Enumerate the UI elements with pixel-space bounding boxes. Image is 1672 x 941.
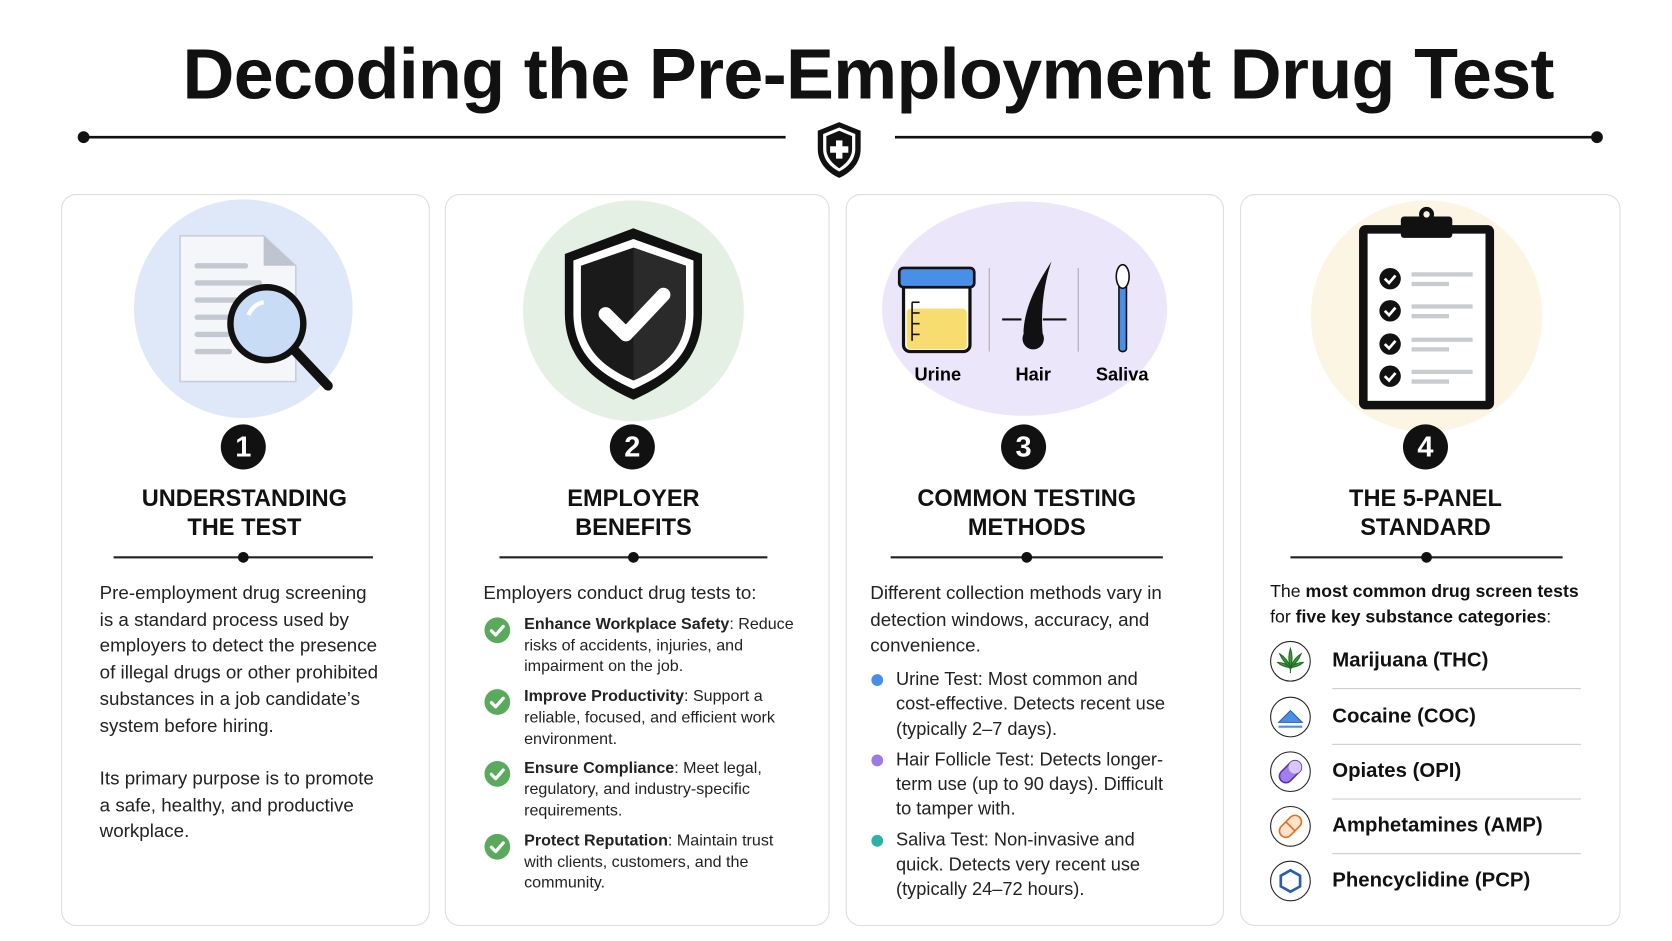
icon: urine hair saliva xyxy=(882,202,1168,416)
badge 4: 4 xyxy=(1417,431,1434,463)
benefit list: Enhance Workplace Safety: Reduce risks of accidents, injuries, and impairment on the job. xyxy=(524,615,794,676)
panel: understanding the test xyxy=(61,194,430,926)
item: phencyclidine xyxy=(1270,860,1530,902)
icon: clipboard xyxy=(1310,200,1542,431)
icon: document with magnifier xyxy=(134,200,352,418)
heading 4: THE 5-PANEL xyxy=(1349,484,1502,511)
text block 1: Pre-employment drug screening is a standard process used by employers to detect the presence of illegal drugs or other prohibited substances in a job candidate’s system before hiring. xyxy=(100,582,378,736)
panel: common testing methods xyxy=(846,194,1224,926)
badge 1 xyxy=(221,424,266,469)
item: amphetamines: Amphetamines (AMP) xyxy=(1332,815,1543,837)
item: cocaine: Cocaine (COC) xyxy=(1332,705,1476,728)
icon: urine hair saliva: Saliva xyxy=(1096,364,1149,384)
heading 2: EMPLOYER xyxy=(567,484,700,511)
methods list: Hair Follicle Test: Detects longer-term use (up to 90 days). Difficult to tamper with. xyxy=(896,749,1163,819)
badge 4 xyxy=(1403,424,1448,469)
item: phencyclidine: Phencyclidine (PCP) xyxy=(1332,869,1530,892)
heading 3 xyxy=(917,484,1136,540)
text block 1 xyxy=(100,582,378,842)
methods list: Urine Test: Most common and cost-effective. Detects recent use (typically 2–7 days). xyxy=(896,669,1165,739)
drug list xyxy=(1270,640,1581,902)
item: marijuana xyxy=(1270,640,1488,682)
item: opiates: Opiates (OPI) xyxy=(1332,760,1461,782)
heading 2 xyxy=(567,484,700,540)
badge 2 xyxy=(610,424,655,469)
text block 3: Different collection methods vary in detection windows, accuracy, and convenience. xyxy=(870,582,1162,656)
icon: shield with cross xyxy=(818,122,861,178)
text block 1: Its primary purpose is to promote a safe, healthy, and productive workplace. xyxy=(100,767,374,842)
badge 3: 3 xyxy=(1016,431,1032,463)
heading 1: THE TEST xyxy=(187,513,301,540)
icon: urine hair saliva: Hair xyxy=(1015,364,1051,384)
item: cocaine xyxy=(1270,696,1476,738)
heading 3: METHODS xyxy=(968,513,1086,540)
header divider xyxy=(78,131,1603,144)
icon: shield check xyxy=(523,200,744,422)
text block 2: Improve Productivity: Support a reliable, focused, and efficient work environment. xyxy=(524,687,775,748)
methods list xyxy=(871,669,1165,900)
item: opiates xyxy=(1270,751,1461,792)
heading 2: BENEFITS xyxy=(575,513,692,540)
panel: employer benefits xyxy=(445,194,830,926)
text block 4: The most common drug screen tests for five key substance categories: xyxy=(1270,582,1579,626)
badge 3 xyxy=(1001,424,1046,469)
text block 2: Ensure Compliance: Meet legal, regulatory, and industry-specific requirements. xyxy=(524,759,762,820)
badge 2: 2 xyxy=(624,431,640,463)
heading 3: COMMON TESTING xyxy=(917,484,1136,511)
item: marijuana: Marijuana (THC) xyxy=(1332,650,1488,672)
heading 1 xyxy=(142,484,347,540)
icon: urine hair saliva: Urine xyxy=(915,364,961,384)
item: amphetamines xyxy=(1270,806,1543,847)
panel: 5-panel standard xyxy=(1240,194,1621,926)
badge 1: 1 xyxy=(235,431,251,463)
text block 2: Employers conduct drug tests to: xyxy=(483,582,757,603)
text block 2: Protect Reputation: Maintain trust with clients, customers, and the community. xyxy=(524,832,773,892)
heading 1: UNDERSTANDING xyxy=(142,484,347,511)
methods list: Saliva Test: Non-invasive and quick. Detects very recent use (typically 24–72 hours). xyxy=(896,829,1140,900)
heading 4 xyxy=(1349,484,1502,540)
title: Decoding the Pre-Employment Drug Test xyxy=(182,34,1554,115)
heading 4: STANDARD xyxy=(1360,513,1491,540)
text block 2 xyxy=(483,582,794,892)
